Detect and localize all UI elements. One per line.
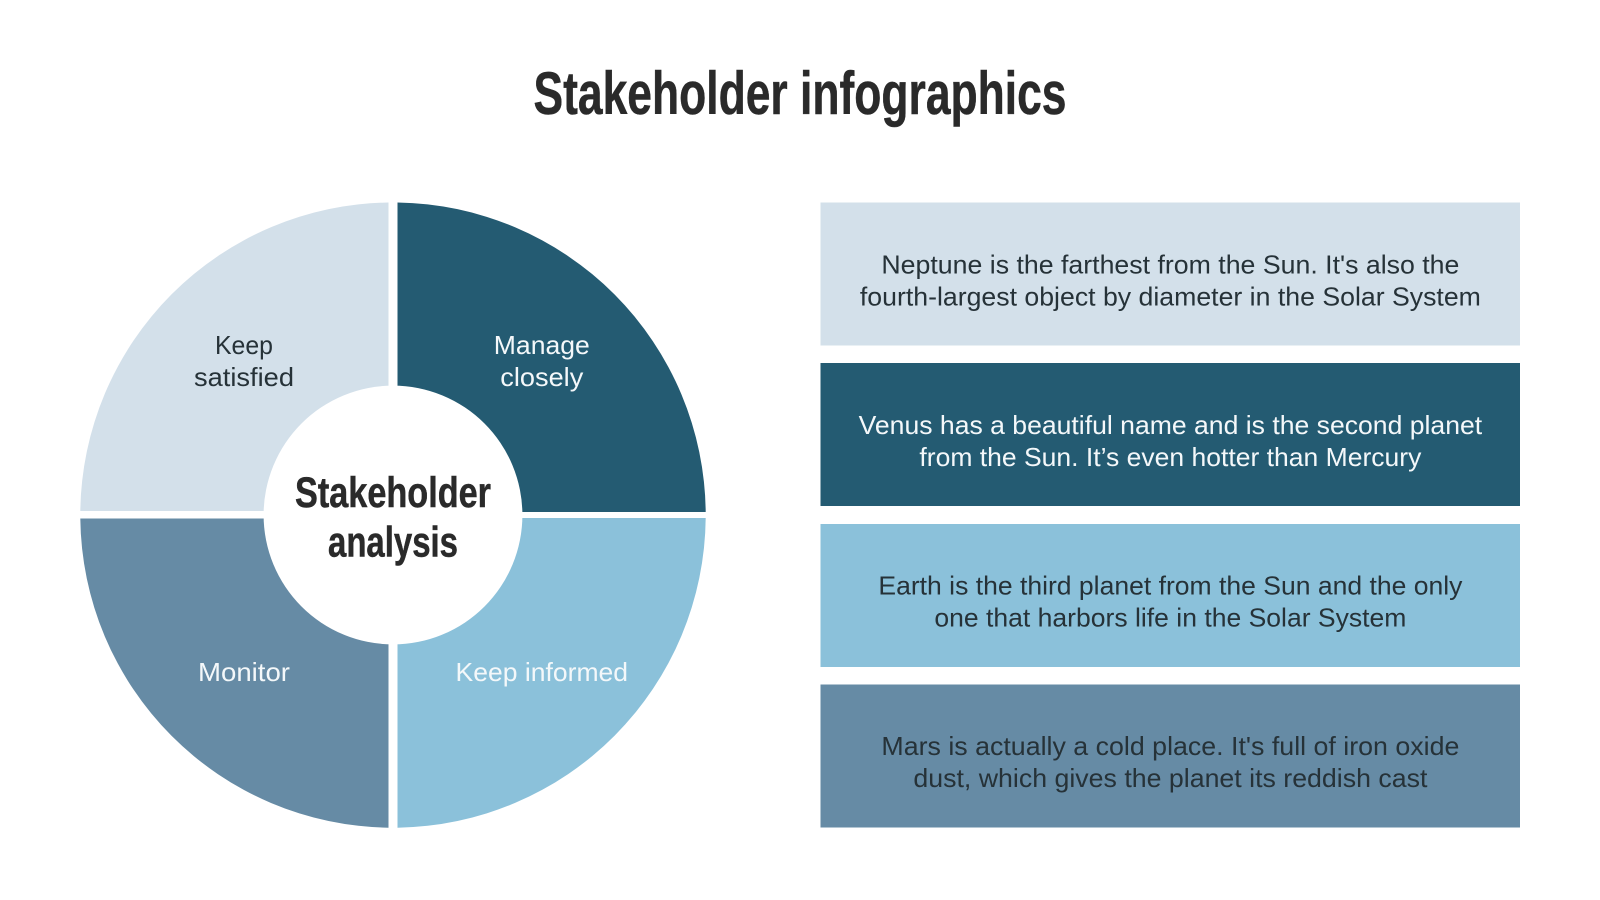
segment: monitor: Monitor	[198, 659, 291, 687]
segment: manage closely	[398, 202, 706, 512]
center label: Stakeholder	[295, 469, 491, 517]
center label: analysis	[328, 518, 458, 566]
segment: monitor	[80, 518, 389, 828]
segment: keep informed	[398, 518, 706, 828]
panel: Neptune	[820, 202, 1520, 346]
title: Stakeholder infographics	[534, 60, 1066, 127]
segment: keep satisfied: Keep	[215, 332, 273, 360]
panel: Earth	[820, 524, 1520, 667]
panel: Venus	[820, 363, 1520, 506]
segment: keep informed: Keep informed	[456, 659, 628, 687]
panel: Venus: from the Sun. It’s even hotter than Mercury	[919, 444, 1422, 472]
donut chart: stakeholder analysis	[80, 202, 706, 828]
panel: Earth: Earth is the third planet from the Sun and the only	[878, 573, 1463, 601]
segment: keep satisfied	[80, 202, 389, 511]
segment: keep satisfied: satisfied	[194, 364, 294, 392]
panel: Mars: dust, which gives the planet its reddish cast	[913, 765, 1427, 793]
segment: manage closely: Manage	[494, 332, 590, 360]
center label	[264, 386, 522, 644]
panel: Venus: Venus has a beautiful name and is the second planet	[859, 412, 1482, 440]
panel: Neptune: fourth-largest object by diameter in the Solar System	[860, 284, 1481, 312]
panel: Mars: Mars is actually a cold place. It's full of iron oxide	[881, 733, 1459, 761]
segment: manage closely: closely	[500, 364, 584, 392]
panel: Mars	[820, 684, 1520, 828]
panel: Earth: one that harbors life in the Solar System	[934, 605, 1406, 633]
panel: Neptune: Neptune is the farthest from the Sun. It's also the	[881, 252, 1459, 280]
